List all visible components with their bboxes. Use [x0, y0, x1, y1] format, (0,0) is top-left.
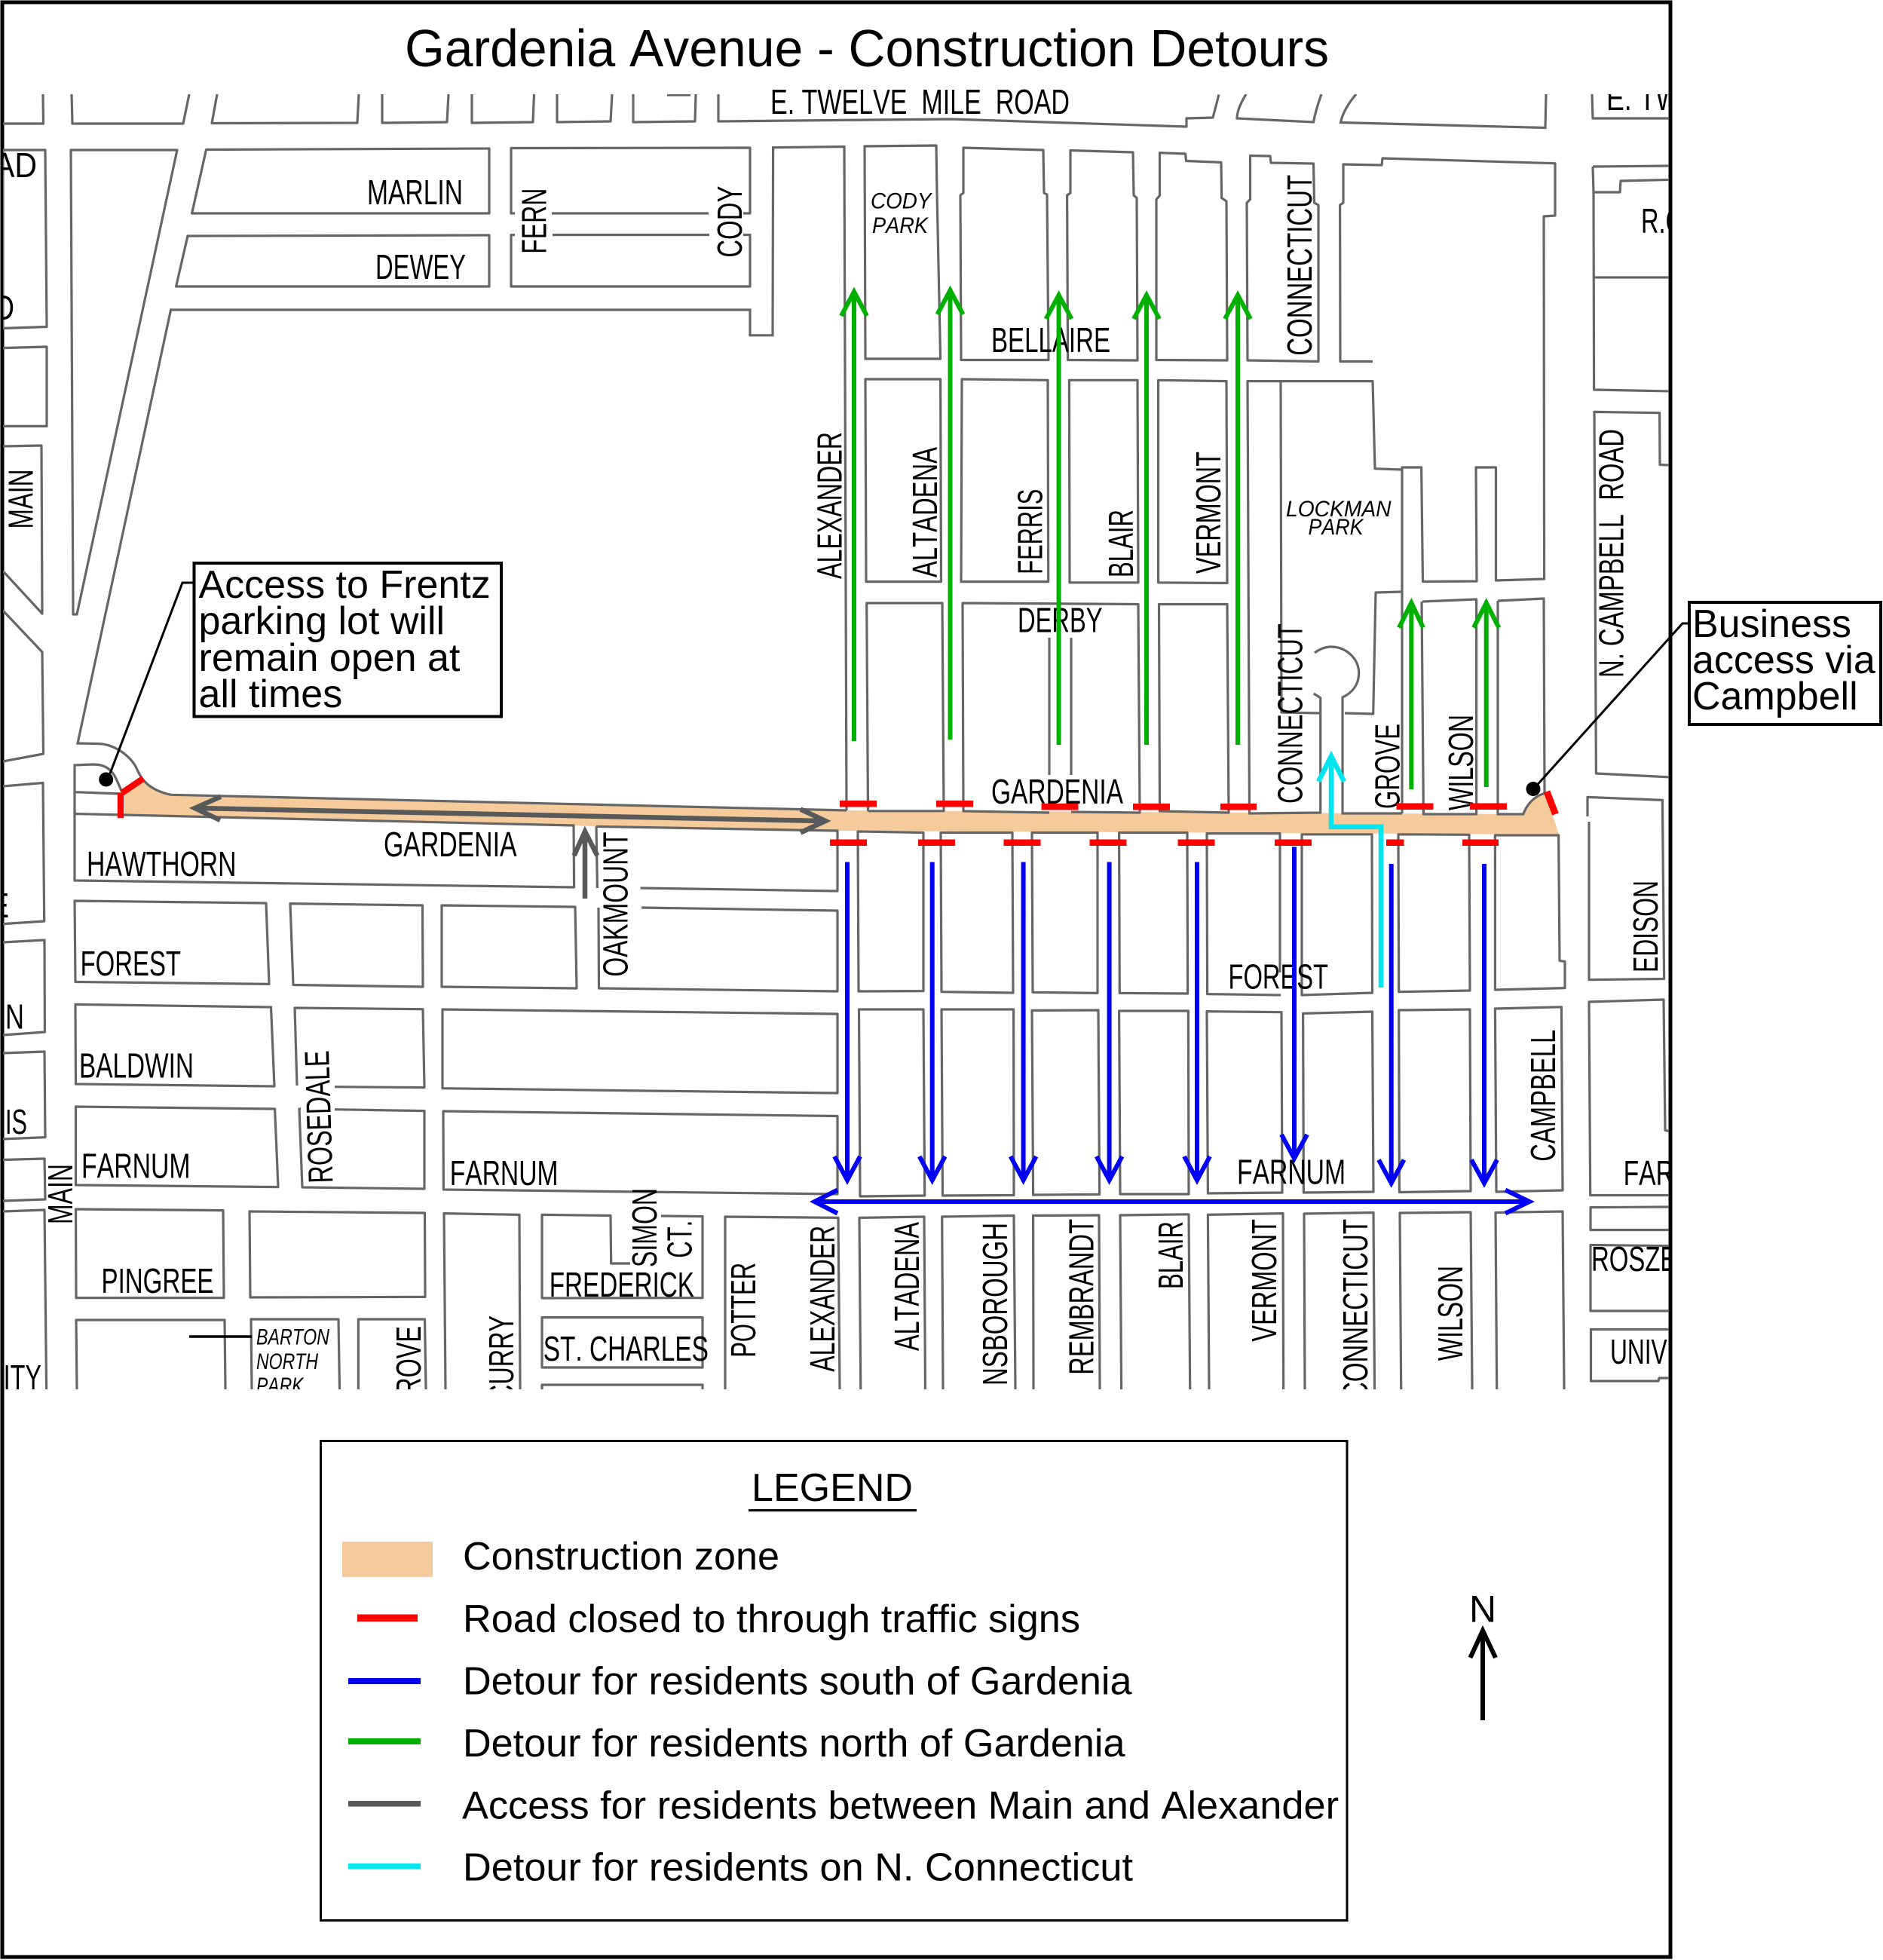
vertical street labels: BLAIR — [1101, 510, 1141, 577]
legend: construction zone: Construction zone — [463, 1535, 779, 1579]
vertical street labels: ALEXANDER — [810, 432, 850, 579]
legend: Connecticut detour: Detour for residents on N. Connecticut — [463, 1845, 1134, 1889]
callout: Frentz parking lot — [99, 563, 501, 787]
red road-closed bars — [121, 779, 1556, 846]
north arrow — [1469, 1588, 1496, 1720]
horizontal street labels: BALDWIN — [79, 1046, 194, 1085]
vertical street labels: POTTER — [724, 1263, 763, 1358]
vertical street labels: CONNECTICUT — [1280, 175, 1319, 356]
vertical street labels: SIMON — [625, 1188, 664, 1267]
vertical street labels: GROVE — [389, 1326, 428, 1414]
vertical street labels — [2, 175, 1665, 1414]
vertical street labels: CODY — [710, 186, 749, 258]
callout: business access via Campbell: Business — [1692, 602, 1851, 646]
vertical street labels: WILSON — [1441, 715, 1480, 810]
title: Gardenia Avenue - Construction Detours — [405, 19, 1329, 78]
dark grey arrows: access between Main and Alexander — [194, 797, 825, 899]
horizontal street labels: ST. CHARLES — [543, 1329, 709, 1368]
blue arrows: south of Gardenia detours — [815, 847, 1529, 1214]
park labels — [256, 189, 1392, 1398]
park labels: PARK — [1309, 515, 1364, 540]
horizontal street labels: GARDENIA — [991, 772, 1123, 811]
vertical street labels: ALTADENA — [905, 447, 945, 577]
horizontal street labels: E. TWELVE — [1606, 78, 1750, 118]
horizontal street labels: FOREST — [81, 944, 181, 983]
park labels: PARK — [256, 1374, 305, 1398]
vertical street labels: WILSON — [1431, 1266, 1470, 1361]
park labels: CODY — [871, 189, 932, 214]
legend: road closed: Road closed to through traffic signs — [463, 1597, 1080, 1641]
legend: north detour: Detour for residents north of Gardenia — [463, 1722, 1125, 1766]
horizontal street labels: N — [5, 997, 24, 1036]
horizontal street labels: FREDERICK — [550, 1265, 694, 1304]
vertical street labels: BLAIR — [1151, 1221, 1190, 1289]
horizontal street labels: GARDENIA — [384, 825, 517, 864]
horizontal street labels: FARNUM — [450, 1153, 558, 1193]
horizontal street labels — [0, 78, 1753, 1397]
horizontal street labels: PINGREE — [101, 1261, 214, 1300]
horizontal street labels: DEWEY — [375, 247, 466, 286]
horizontal street labels: FOREST — [1229, 957, 1328, 997]
horizontal street labels: BELLAIRE — [991, 320, 1110, 360]
park labels: PARK — [872, 213, 929, 238]
legend heading: LEGEND — [752, 1466, 913, 1510]
horizontal street labels: MARLIN — [367, 173, 463, 212]
vertical street labels: REMBRANDT — [1062, 1219, 1101, 1375]
E. Twelve Mile Road label: E. TWELVE MILE ROAD — [770, 82, 1070, 121]
vertical street labels: VERMONT — [1189, 452, 1228, 574]
horizontal street labels: FARNUM — [1237, 1153, 1346, 1192]
vertical street labels: N. CAMPBELL ROAD — [1592, 429, 1631, 678]
park labels: LOCKMAN — [1286, 497, 1392, 522]
vertical street labels: CT. — [660, 1220, 700, 1258]
horizontal street labels: IS — [5, 1102, 27, 1141]
callout: Frentz parking lot: remain open at — [199, 636, 461, 680]
vertical street labels: NSBOROUGH — [975, 1223, 1015, 1386]
vertical street labels: OAKMOUNT — [596, 832, 635, 977]
cyan arrow: N. Connecticut detour — [1318, 756, 1381, 988]
legend panel — [321, 1441, 1347, 1921]
street map — [0, 78, 1753, 1414]
vertical street labels: VERMONT — [1245, 1219, 1284, 1342]
Barton North Park pointer — [189, 1335, 252, 1338]
callout: Frentz parking lot: Access to Frentz — [199, 563, 491, 607]
park labels: NORTH — [256, 1349, 318, 1374]
vertical street labels: CAMPBELL — [1523, 1030, 1563, 1162]
vertical street labels: ROSEDALE — [297, 1050, 340, 1184]
horizontal street labels: R.C — [1641, 201, 1683, 240]
vertical street labels: ALEXANDER — [803, 1226, 842, 1372]
legend: south detour: Detour for residents south of Gardenia — [463, 1660, 1132, 1704]
horizontal street labels: FARNUM — [81, 1147, 191, 1186]
vertical street labels: ALTADENA — [887, 1222, 926, 1351]
vertical street labels: GROVE — [1368, 724, 1407, 809]
callout: business access via Campbell: access via — [1692, 639, 1875, 682]
legend: resident access: Access for residents between Main and Alexander — [462, 1784, 1339, 1827]
vertical street labels: CONNECTICUT — [1271, 623, 1310, 804]
horizontal street labels: UNIVERSITY — [1610, 1332, 1753, 1371]
callout: business access via Campbell: Campbell — [1692, 675, 1858, 718]
horizontal street labels: HAWTHORN — [87, 844, 237, 884]
north arrow: N — [1469, 1588, 1496, 1630]
vertical street labels: CURRY — [482, 1315, 521, 1402]
callout: Frentz parking lot: parking lot will — [199, 599, 445, 643]
vertical street labels: EDISON — [1626, 880, 1665, 972]
vertical street labels: CONNECTICUT — [1336, 1219, 1375, 1400]
callout: business access via Campbell — [1526, 602, 1881, 796]
horizontal street labels: DERBY — [1018, 600, 1103, 639]
horizontal street labels: ROSZELL — [1591, 1239, 1704, 1279]
vertical street labels: FERN — [515, 188, 554, 254]
callout: Frentz parking lot: all times — [199, 672, 342, 716]
construction zone on Gardenia — [124, 779, 1559, 835]
horizontal street labels: FARNUM — [1624, 1153, 1732, 1193]
park labels: BARTON — [256, 1325, 329, 1350]
vertical street labels: MAIN — [41, 1164, 80, 1224]
vertical street labels: MAIN — [2, 469, 41, 529]
green arrows: north of Gardenia detours — [841, 290, 1499, 789]
road network outlines — [3, 94, 1670, 1389]
vertical street labels: FERRIS — [1011, 489, 1050, 574]
